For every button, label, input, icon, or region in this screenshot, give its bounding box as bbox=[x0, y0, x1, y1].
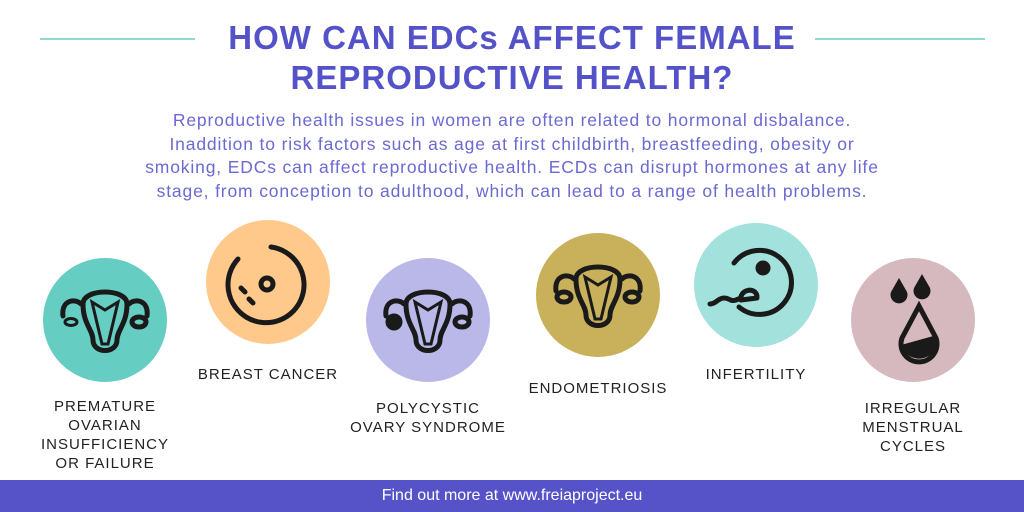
icon: menstrual drops bbox=[851, 258, 975, 382]
intro text bbox=[145, 110, 879, 200]
intro text: smoking, EDCs can affect reproductive health. ECDs can disrupt hormones at any life bbox=[145, 157, 879, 177]
intro text: Inaddition to risk factors such as age at first childbirth, breastfeeding, obesity or bbox=[169, 134, 855, 154]
title: HOW CAN EDCs AFFECT FEMALE bbox=[228, 19, 796, 56]
footer: Find out more at www.freiaproject.eu bbox=[382, 487, 642, 504]
label: irregular cycles: MENSTRUAL bbox=[862, 419, 964, 436]
footer bbox=[0, 480, 1024, 512]
label: irregular cycles bbox=[862, 400, 964, 455]
label: premature: OVARIAN bbox=[68, 417, 142, 434]
label: irregular cycles: IRREGULAR bbox=[865, 400, 961, 417]
label: infertility: INFERTILITY bbox=[706, 366, 806, 383]
label: pcos: POLYCYSTIC bbox=[376, 400, 480, 417]
label: breast cancer: BREAST CANCER bbox=[198, 366, 338, 383]
label: premature: PREMATURE bbox=[54, 398, 156, 415]
icon: breast cancer bbox=[206, 220, 330, 344]
icon: premature ovarian insufficiency bbox=[43, 258, 167, 382]
intro text: Reproductive health issues in women are often related to hormonal disbalance. bbox=[173, 110, 851, 130]
label: premature: INSUFFICIENCY bbox=[41, 436, 169, 453]
icon: endometriosis bbox=[536, 233, 660, 357]
intro text: stage, from conception to adulthood, which can lead to a range of health problems. bbox=[157, 180, 867, 200]
icon: infertility bbox=[694, 223, 818, 347]
label: endometriosis: ENDOMETRIOSIS bbox=[529, 380, 667, 397]
label: irregular cycles: CYCLES bbox=[880, 438, 946, 455]
label: pcos: OVARY SYNDROME bbox=[350, 419, 506, 436]
title bbox=[228, 19, 796, 96]
title: REPRODUCTIVE HEALTH? bbox=[291, 59, 733, 96]
label: pcos bbox=[350, 400, 506, 436]
label: premature: OR FAILURE bbox=[55, 455, 155, 472]
icon: polycystic ovary bbox=[366, 258, 490, 382]
label: premature bbox=[41, 398, 169, 472]
